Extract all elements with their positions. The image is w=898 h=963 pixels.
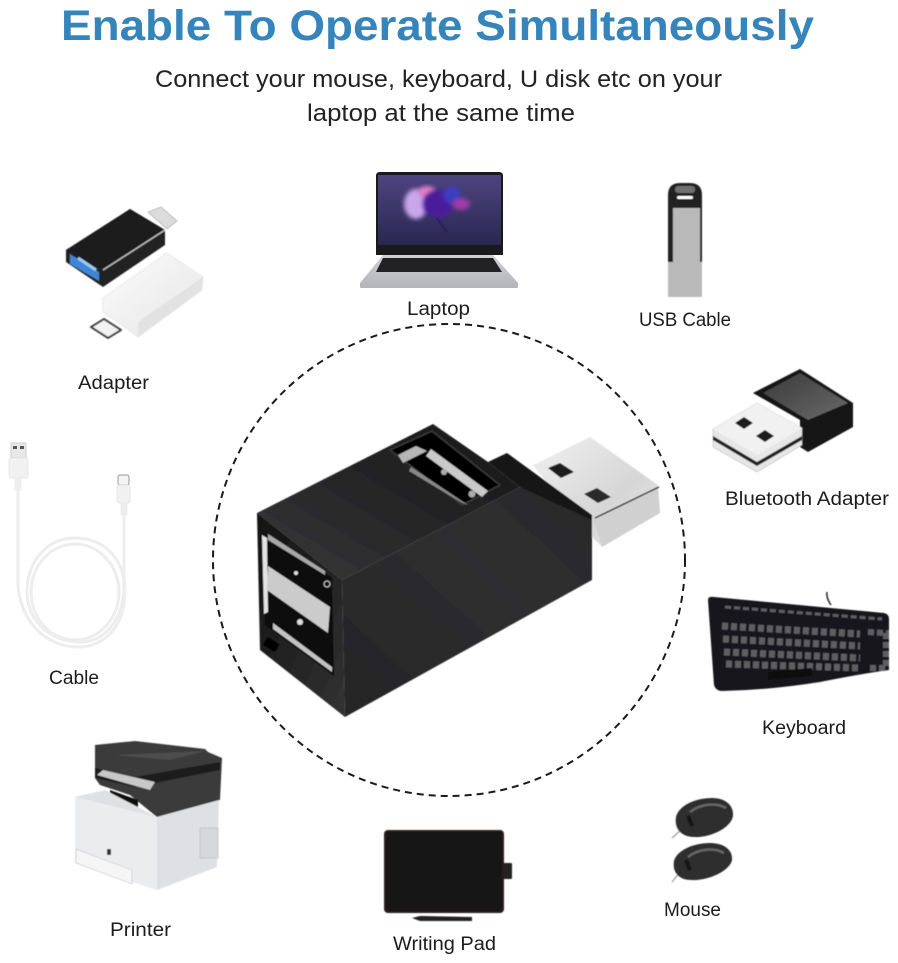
top USB port: [390, 431, 500, 505]
USB plug: [533, 437, 660, 547]
cable coil: [18, 490, 125, 647]
label: USB Cable: USB Cable: [639, 310, 731, 331]
body: [753, 369, 853, 452]
printer body: [75, 790, 219, 890]
label: Cable: Cable: [49, 668, 99, 689]
icon: USB hub: [257, 424, 660, 717]
metal: [668, 208, 702, 297]
icon: printer: [75, 741, 222, 890]
USB-A plug: [11, 443, 26, 458]
label: Bluetooth Adapter: Bluetooth Adapter: [725, 489, 890, 510]
label: Laptop: Laptop: [407, 299, 470, 320]
plug: [713, 403, 802, 472]
icon: USB flash drive: [668, 183, 702, 297]
USB-C plug: [118, 475, 129, 485]
base: [360, 255, 518, 288]
front face: [257, 513, 345, 717]
label: Adapter: Adapter: [78, 373, 150, 394]
label: Printer: Printer: [110, 920, 172, 941]
front USB ports: [262, 533, 334, 676]
label: Writing Pad: Writing Pad: [393, 934, 496, 955]
title: Enable To Operate Simultaneously: [61, 2, 814, 50]
key grid: [722, 607, 886, 668]
icon: Bluetooth adapter: [713, 369, 853, 472]
dashed circle: [213, 324, 685, 796]
lower mouse: [672, 843, 732, 882]
wallpaper flower: [404, 186, 470, 232]
scanner unit: [95, 741, 222, 817]
neck: [488, 453, 592, 523]
subtitle: [155, 66, 722, 127]
icon: keyboard: [708, 592, 889, 691]
icon: adapters: [66, 207, 203, 338]
black adapter: [66, 207, 177, 287]
icon: cable: [9, 443, 130, 647]
icon: mice: [672, 798, 733, 882]
top face: [257, 424, 520, 580]
loop cap: [668, 183, 702, 262]
icon: laptop: [360, 172, 518, 288]
pen: [412, 916, 472, 921]
upper mouse: [672, 798, 733, 838]
label: Mouse: Mouse: [664, 900, 721, 921]
screen: [376, 172, 503, 255]
label: Keyboard: Keyboard: [762, 718, 846, 739]
side face: [342, 487, 592, 717]
white adapter: [91, 253, 203, 338]
subtitle: Connect your mouse, keyboard, U disk etc on your: [155, 66, 722, 93]
subtitle: laptop at the same time: [307, 100, 575, 127]
icon: writing pad: [384, 830, 512, 921]
